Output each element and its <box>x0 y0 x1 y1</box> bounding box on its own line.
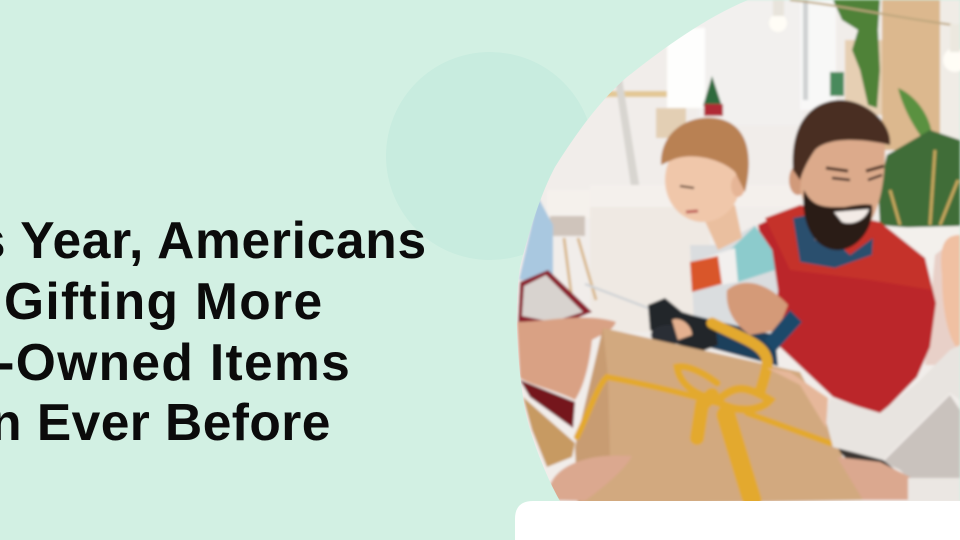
decorative circle <box>386 52 594 260</box>
man <box>758 205 936 415</box>
ribbon <box>577 323 830 500</box>
white content card <box>515 501 960 540</box>
girl <box>941 235 960 352</box>
gift box and hands <box>517 318 616 400</box>
title <box>0 211 427 451</box>
ivy <box>833 0 880 108</box>
toy car <box>648 298 718 352</box>
plant <box>878 88 960 232</box>
photo: family exchanging a wrapped gift <box>510 0 960 505</box>
boy <box>690 225 778 345</box>
